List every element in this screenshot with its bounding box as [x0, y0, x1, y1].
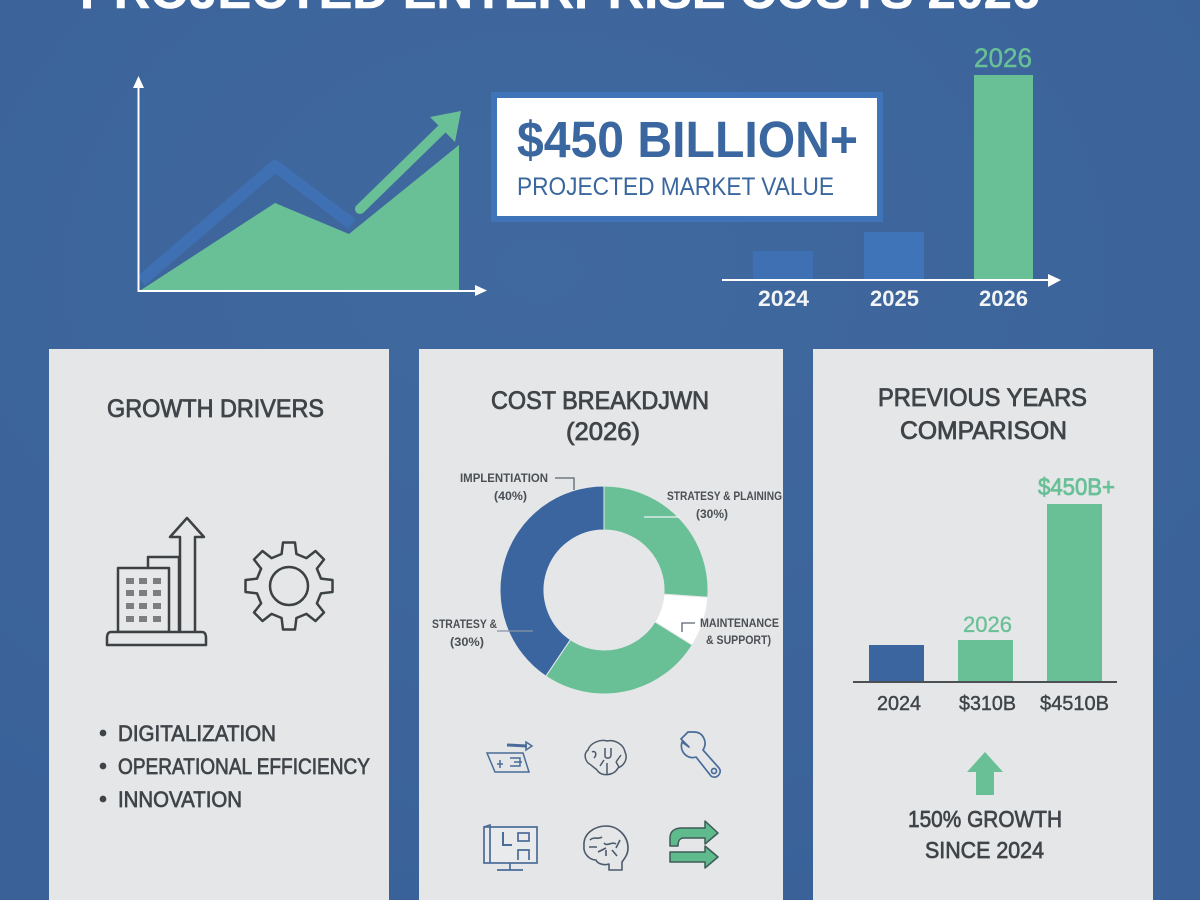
icon: green process arrows [670, 821, 718, 868]
donut labels: & SUPPORT) [706, 633, 771, 647]
area chart [133, 76, 487, 296]
bar 2026 [974, 75, 1033, 279]
comparison bar chart: $450B+ [1038, 474, 1115, 501]
heading: cost breakdown: (2026) [566, 418, 640, 446]
growth statement: SINCE 2024 [925, 837, 1044, 863]
donut labels: STRATESY & PLAINING [667, 489, 782, 503]
icon: growth arrow [967, 752, 1003, 795]
comparison bar chart: $4510B [1040, 693, 1109, 715]
icon: gear [246, 542, 332, 630]
bar 2025 [864, 232, 924, 279]
comparison bar chart: 2026 [963, 612, 1012, 637]
bullet list: INNOVATION [118, 787, 242, 812]
panel: previous years comparison [813, 349, 1153, 900]
bar axis [722, 274, 1061, 287]
donut leader lines [497, 478, 695, 632]
callout value: $450 BILLION+ [517, 111, 858, 168]
icon: monitor layout [484, 825, 537, 870]
callout caption: PROJECTED MARKET VALUE [517, 173, 834, 201]
callout: market value [494, 95, 880, 219]
icon: wrench [681, 732, 720, 777]
donut labels: MAINTENANCE [700, 616, 779, 630]
icon: brain profile [584, 826, 628, 870]
panel: growth drivers [49, 349, 389, 900]
donut labels: IMPLENTIATION [460, 471, 548, 485]
growth statement [908, 806, 1062, 863]
chart axes [133, 76, 487, 296]
year labels: 2024 [758, 286, 810, 311]
bullet list: DIGITALIZATION [118, 721, 276, 746]
bar value label: 2026 [974, 43, 1032, 73]
donut labels: (30%) [696, 507, 728, 521]
year labels: 2026 [979, 286, 1028, 311]
comparison bar chart: $310B [959, 693, 1016, 715]
heading: growth drivers: GROWTH DRIVERS [107, 395, 324, 423]
donut labels [432, 471, 782, 649]
icon: small brain [585, 740, 626, 775]
heading: cost breakdown: COST BREAKDJWN [491, 387, 709, 415]
heading: comparison [878, 384, 1087, 445]
year labels [758, 286, 1028, 311]
chart area fill [141, 145, 459, 290]
heading: cost breakdown [491, 387, 709, 446]
icon: building with arrow [107, 518, 206, 645]
growth statement: 150% GROWTH [908, 806, 1062, 832]
comparison bar chart: 2024 [877, 693, 921, 715]
bar chart: market by year [722, 43, 1061, 311]
green growth arrow [360, 111, 461, 209]
bullet list: OPERATIONAL EFFICIENCY [118, 754, 370, 779]
comparison bar chart [853, 474, 1117, 715]
year labels: 2025 [870, 286, 919, 311]
icon: blueprint plan [487, 742, 532, 772]
donut chart [500, 486, 708, 694]
heading: comparison: COMPARISON [900, 417, 1067, 445]
donut labels: (30%) [450, 635, 484, 649]
bar 2024 [753, 251, 813, 279]
blue trend line [141, 166, 352, 281]
donut labels: STRATESY & [432, 617, 497, 631]
heading: comparison: PREVIOUS YEARS [878, 384, 1087, 412]
donut labels: (40%) [494, 489, 527, 503]
panel: cost breakdown [419, 349, 783, 900]
bullet list [100, 721, 370, 812]
